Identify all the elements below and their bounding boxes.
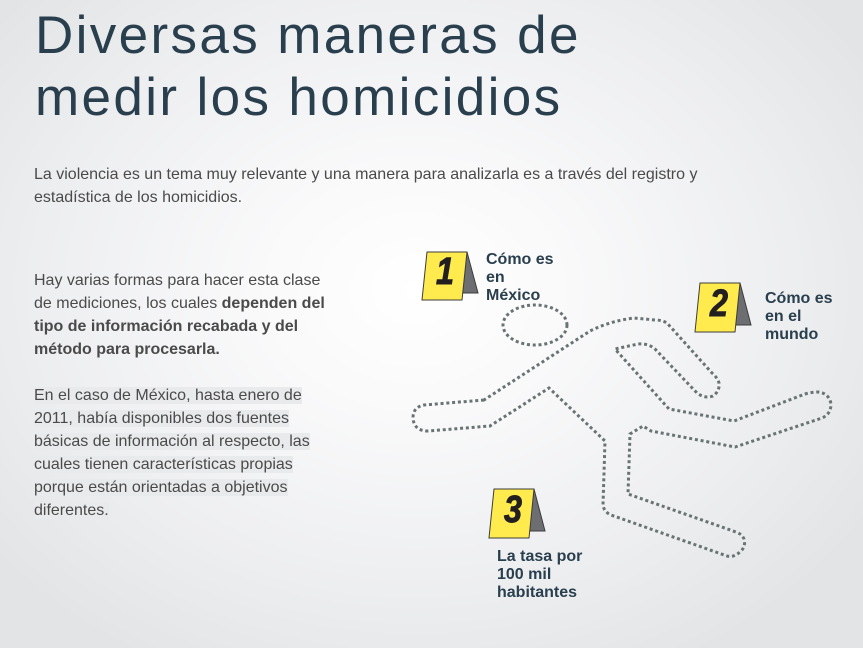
- title: Diversas maneras de: [35, 6, 581, 65]
- label 3: La tasa por: [497, 548, 582, 565]
- text block: measurement methods: [34, 272, 325, 358]
- marker 1: 1: [436, 251, 454, 293]
- intro text: [34, 166, 698, 206]
- label 1: en: [486, 269, 505, 286]
- text block: measurement methods: de mediciones, los cuales dependen del: [34, 295, 325, 312]
- title: medir los homicidios: [35, 68, 563, 127]
- text block: case of Mexico: [34, 387, 310, 519]
- text block: case of Mexico: diferentes.: [34, 502, 109, 519]
- label 2: Cómo es: [765, 290, 833, 307]
- text block: case of Mexico: básicas de información al respecto, las: [34, 433, 310, 450]
- text block: case of Mexico: En el caso de México, hasta enero de: [34, 387, 302, 404]
- label 3: [497, 548, 582, 601]
- intro text: estadística de los homicidios.: [34, 189, 242, 206]
- marker 3: [489, 489, 545, 538]
- label 3: 100 mil: [497, 566, 551, 583]
- marker 2: 2: [709, 283, 728, 325]
- label 1: Cómo es: [486, 251, 554, 268]
- marker 2: [695, 283, 751, 332]
- label 1: [486, 251, 554, 304]
- label 2: en el: [765, 308, 801, 325]
- body outline: head: [503, 305, 567, 345]
- text block: measurement methods: tipo de información recabada y del: [34, 318, 298, 335]
- label 3: habitantes: [497, 584, 577, 601]
- text block: case of Mexico: porque están orientadas a objetivos: [34, 479, 288, 496]
- text block: case of Mexico: 2011, había disponibles dos fuentes: [34, 410, 289, 427]
- intro text: La violencia es un tema muy relevante y una manera para analizarla es a través del registro y: [34, 166, 697, 183]
- text block: case of Mexico: cuales tienen características propias: [34, 456, 293, 473]
- label 2: mundo: [765, 326, 818, 343]
- label 1: México: [486, 287, 540, 304]
- text block: measurement methods: Hay varias formas para hacer esta clase: [34, 272, 320, 289]
- body outline: torso and limbs: [413, 318, 831, 556]
- marker 1: [422, 251, 478, 300]
- title: [35, 6, 581, 127]
- marker 3: 3: [504, 489, 522, 531]
- text block: measurement methods: método para procesarla.: [34, 341, 220, 358]
- label 2: [765, 290, 833, 343]
